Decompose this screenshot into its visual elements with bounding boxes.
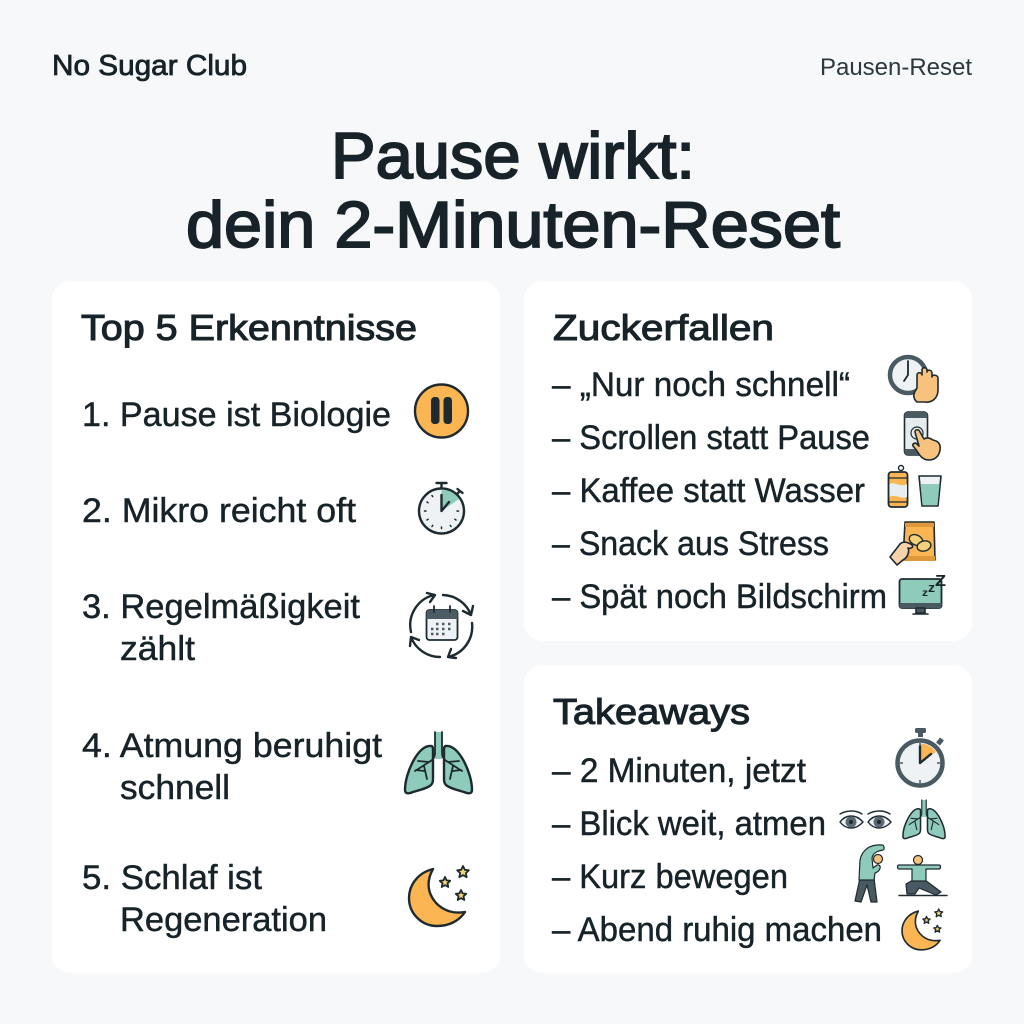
title: dein 2-Minuten-Reset bbox=[186, 188, 840, 261]
list item: – „Nur noch schnell“ bbox=[552, 366, 850, 404]
icon: stopwatch bbox=[898, 728, 942, 786]
icon: monitor with sleep symbols: Z bbox=[935, 573, 946, 590]
icon: moon and stars small bbox=[902, 909, 943, 950]
icon: phone with tapping hand bbox=[904, 412, 940, 460]
item 3 text: zählt bbox=[120, 630, 196, 668]
item 1 text: 1. Pause ist Biologie bbox=[82, 396, 391, 434]
icon: monitor with sleep symbols: z bbox=[922, 588, 928, 599]
icon: calendar with cycle arrows bbox=[410, 593, 473, 658]
item 4 text bbox=[82, 727, 383, 807]
title: Pause wirkt: bbox=[331, 119, 695, 192]
item 4 text: schnell bbox=[120, 769, 230, 807]
icon: monitor with sleep symbols bbox=[900, 573, 946, 614]
icon: can and water glass bbox=[888, 466, 941, 507]
list item: – Blick weit, atmen bbox=[552, 805, 826, 843]
item 5 text bbox=[82, 859, 327, 939]
panel: Takeaways bbox=[524, 665, 972, 973]
panel heading: Top 5 Erkenntnisse bbox=[81, 307, 417, 348]
icon: monitor with sleep symbols: z bbox=[928, 580, 936, 595]
icon: pause button bbox=[415, 384, 468, 438]
icon: lungs bbox=[405, 732, 472, 793]
icon: moon and stars bbox=[409, 866, 469, 926]
item 4 text: 4. Atmung beruhigt bbox=[82, 727, 383, 765]
item 2 text: 2. Mikro reicht oft bbox=[82, 492, 357, 530]
item 5 text: Regeneration bbox=[120, 901, 327, 939]
list item: – Kurz bewegen bbox=[552, 858, 788, 896]
icon: clock and stop hand bbox=[890, 357, 938, 402]
list item: – 2 Minuten, jetzt bbox=[552, 752, 807, 790]
icon: lungs small bbox=[903, 800, 945, 839]
title bbox=[186, 119, 840, 261]
list item: – Kaffee statt Wasser bbox=[552, 472, 865, 510]
icon: person stretching to the side bbox=[855, 845, 884, 902]
list item: – Scrollen statt Pause bbox=[552, 419, 870, 457]
panel heading: Takeaways bbox=[553, 691, 750, 732]
icon: person in warrior pose bbox=[898, 856, 947, 896]
panel: Top 5 Erkenntnisse bbox=[52, 281, 500, 973]
item 5 text: 5. Schlaf ist bbox=[82, 859, 263, 897]
icon: stopwatch bbox=[419, 483, 464, 534]
series label: Pausen-Reset bbox=[820, 54, 972, 81]
list item: – Snack aus Stress bbox=[552, 525, 829, 563]
panel heading: Zuckerfallen bbox=[553, 307, 774, 348]
item 3 text: 3. Regelmäßigkeit bbox=[82, 588, 361, 626]
panel: Zuckerfallen bbox=[524, 281, 972, 641]
list item: – Spät noch Bildschirm bbox=[552, 578, 887, 616]
brand name: No Sugar Club bbox=[52, 50, 247, 82]
list item: – Abend ruhig machen bbox=[552, 911, 882, 949]
icon: snack bag and hand bbox=[890, 522, 935, 565]
item 3 text bbox=[82, 588, 361, 668]
icon: eyes bbox=[840, 811, 891, 828]
